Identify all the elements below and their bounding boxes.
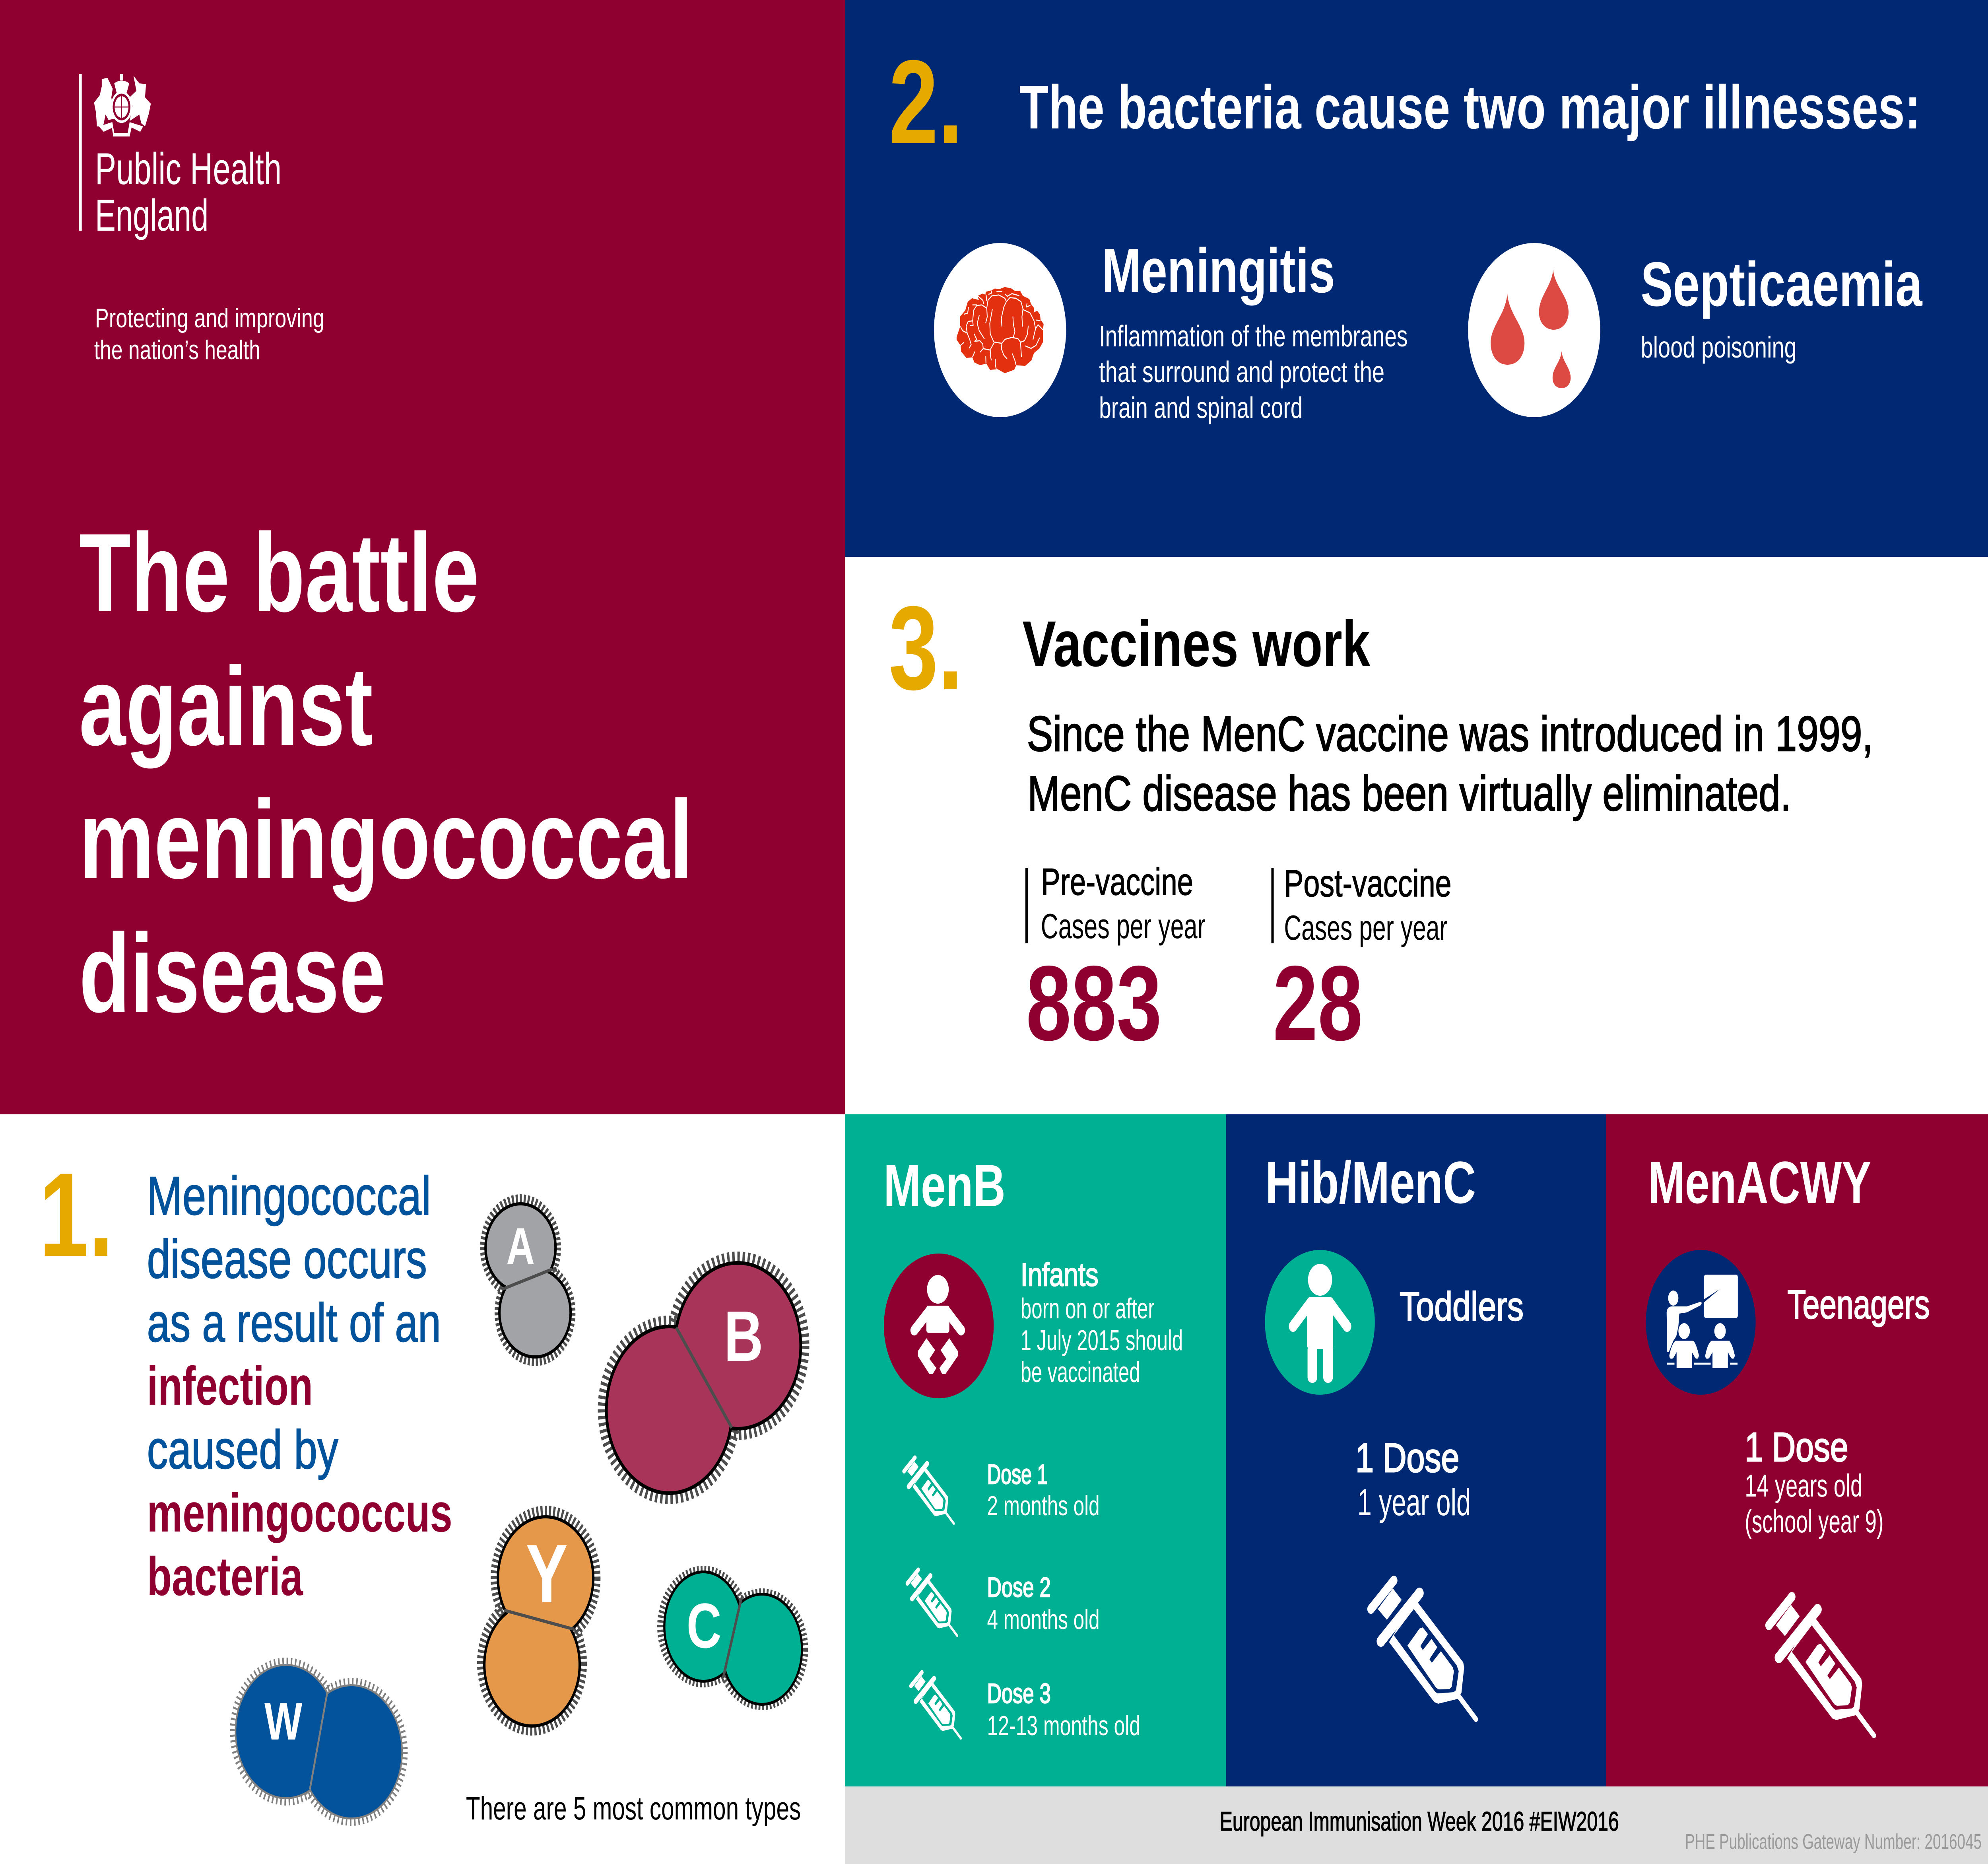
- Septicaemia text block: Septicaemia: [1640, 249, 1922, 319]
- logo wordmark: [95, 144, 282, 241]
- Meningitis text block: Meningitis: [1102, 235, 1335, 306]
- icon: baby in circle: [884, 1254, 994, 1398]
- bacteria B: [602, 1257, 806, 1499]
- section 1 explanation: caused by: [147, 1419, 338, 1480]
- stat: post-vaccine cases: [1271, 862, 1452, 1063]
- icon: syringe MenACWY: [1769, 1597, 1874, 1736]
- dose 2 text: [987, 1572, 1100, 1635]
- section 3 statement: Since the MenC vaccine was introduced in 1999,: [1027, 706, 1873, 762]
- panel: MenACWY background: [1606, 1114, 1988, 1786]
- Infants text block: be vaccinated: [1021, 1356, 1140, 1388]
- title: [79, 510, 693, 1036]
- Meningitis text block: [1099, 235, 1408, 425]
- section 3 number: 3.: [889, 582, 963, 715]
- Meningitis text block: brain and spinal cord: [1099, 392, 1303, 425]
- section 1 explanation: infection: [147, 1355, 313, 1416]
- Hib/MenC dose text: [1355, 1435, 1471, 1523]
- Infants text block: [1021, 1257, 1183, 1388]
- title: The battle: [79, 510, 479, 635]
- Infants text block: 1 July 2015 should: [1021, 1324, 1183, 1357]
- stat: post-vaccine cases: Post-vaccine: [1284, 862, 1452, 905]
- section 2 heading: The bacteria cause two major illnesses:: [1019, 73, 1921, 142]
- stat: pre-vaccine cases: Pre-vaccine: [1041, 861, 1193, 903]
- logo wordmark: England: [95, 191, 208, 241]
- tagline: the nation’s health: [94, 334, 260, 365]
- bacteria W: [232, 1661, 405, 1823]
- MenACWY heading: MenACWY: [1648, 1149, 1871, 1216]
- stat: pre-vaccine cases: [1025, 861, 1206, 1063]
- footer campaign text: European Immunisation Week 2016 #EIW2016: [1220, 1806, 1619, 1837]
- bacteria B: B: [724, 1296, 763, 1376]
- stat: pre-vaccine cases: Cases per year: [1041, 906, 1206, 946]
- icon: classroom in circle: [1646, 1250, 1756, 1395]
- dose 1 text: 2 months old: [987, 1491, 1100, 1522]
- section 1 explanation: bacteria: [147, 1546, 303, 1607]
- icon: syringe dose 1: [904, 1458, 954, 1524]
- section 1 explanation: meningococcus: [147, 1482, 452, 1543]
- dose 2 text: Dose 2: [987, 1572, 1051, 1603]
- bacteria Y: [481, 1510, 597, 1731]
- section 1 explanation: [147, 1165, 452, 1607]
- dose 3 text: Dose 3: [987, 1678, 1051, 1709]
- logo: Public Health England: [79, 74, 282, 241]
- icon: brain in circle: [934, 243, 1066, 417]
- panel: vaccines work background: [845, 557, 1988, 1114]
- panel: Hib/MenC background: [1226, 1114, 1606, 1786]
- section 2 number: 2.: [889, 36, 963, 169]
- stat: post-vaccine cases: Cases per year: [1284, 908, 1448, 947]
- Meningitis text block: Inflammation of the membranes: [1099, 320, 1408, 353]
- MenACWY dose text: [1745, 1425, 1883, 1539]
- panel: MenB background: [845, 1114, 1226, 1786]
- Hib/MenC heading: Hib/MenC: [1265, 1149, 1476, 1216]
- Infants text block: Infants: [1021, 1257, 1099, 1293]
- bacteria A: A: [507, 1218, 535, 1275]
- MenACWY dose text: (school year 9): [1745, 1504, 1883, 1539]
- Toddlers label: Toddlers: [1400, 1284, 1524, 1329]
- Meningitis text block: that surround and protect the: [1099, 356, 1384, 389]
- panel: title background: [0, 0, 845, 1114]
- tagline: [94, 303, 324, 365]
- bacteria C: [660, 1570, 805, 1706]
- dose 1 text: Dose 1: [987, 1459, 1048, 1490]
- dose 3 text: 12-13 months old: [987, 1710, 1140, 1742]
- section 1 explanation: disease occurs: [147, 1228, 427, 1289]
- Hib/MenC dose text: 1 year old: [1357, 1481, 1471, 1523]
- panel: footer background: [845, 1786, 1988, 1864]
- title: meningococcal: [79, 777, 693, 902]
- panel: illnesses background: [845, 0, 1988, 557]
- tagline: Protecting and improving: [95, 303, 324, 333]
- Hib/MenC dose text: 1 Dose: [1355, 1435, 1459, 1481]
- section 1 explanation: as a result of an: [147, 1292, 441, 1353]
- bacteria C: C: [687, 1590, 721, 1662]
- section 3 heading: Vaccines work: [1022, 607, 1371, 680]
- title: against: [79, 643, 373, 769]
- stat: pre-vaccine cases: 883: [1026, 944, 1162, 1063]
- icon: syringe dose 2: [907, 1570, 957, 1636]
- Infants text block: born on or after: [1021, 1293, 1155, 1325]
- bacteria W: W: [264, 1692, 303, 1751]
- dose 1 text: [987, 1459, 1100, 1522]
- icon: syringe Hib/MenC: [1371, 1580, 1476, 1719]
- logo wordmark: Public Health: [95, 144, 282, 194]
- icon: syringe dose 3: [911, 1672, 961, 1738]
- caption: 5 common types: There are 5 most common types: [466, 1790, 801, 1827]
- Septicaemia text block: [1640, 249, 1922, 364]
- icon: royal crest: [94, 74, 151, 136]
- section 3 statement: [1027, 706, 1873, 821]
- icon: blood drops in circle: [1468, 243, 1600, 417]
- MenACWY dose text: 14 years old: [1745, 1468, 1862, 1504]
- stat: post-vaccine cases: 28: [1273, 944, 1363, 1063]
- MenB heading: MenB: [883, 1153, 1006, 1219]
- bacteria Y: Y: [526, 1528, 568, 1620]
- bacteria A: [484, 1199, 572, 1361]
- section 3 statement: MenC disease has been virtually eliminated.: [1027, 766, 1791, 821]
- Teenagers label: Teenagers: [1787, 1282, 1930, 1328]
- dose 3 text: [987, 1678, 1140, 1742]
- title: disease: [79, 910, 386, 1036]
- section 1 explanation: Meningococcal: [147, 1165, 431, 1226]
- section 1 number: 1.: [39, 1149, 113, 1281]
- dose 2 text: 4 months old: [987, 1604, 1100, 1635]
- MenACWY dose text: 1 Dose: [1745, 1425, 1848, 1470]
- Septicaemia text block: blood poisoning: [1640, 331, 1797, 364]
- icon: toddler in circle: [1265, 1250, 1375, 1395]
